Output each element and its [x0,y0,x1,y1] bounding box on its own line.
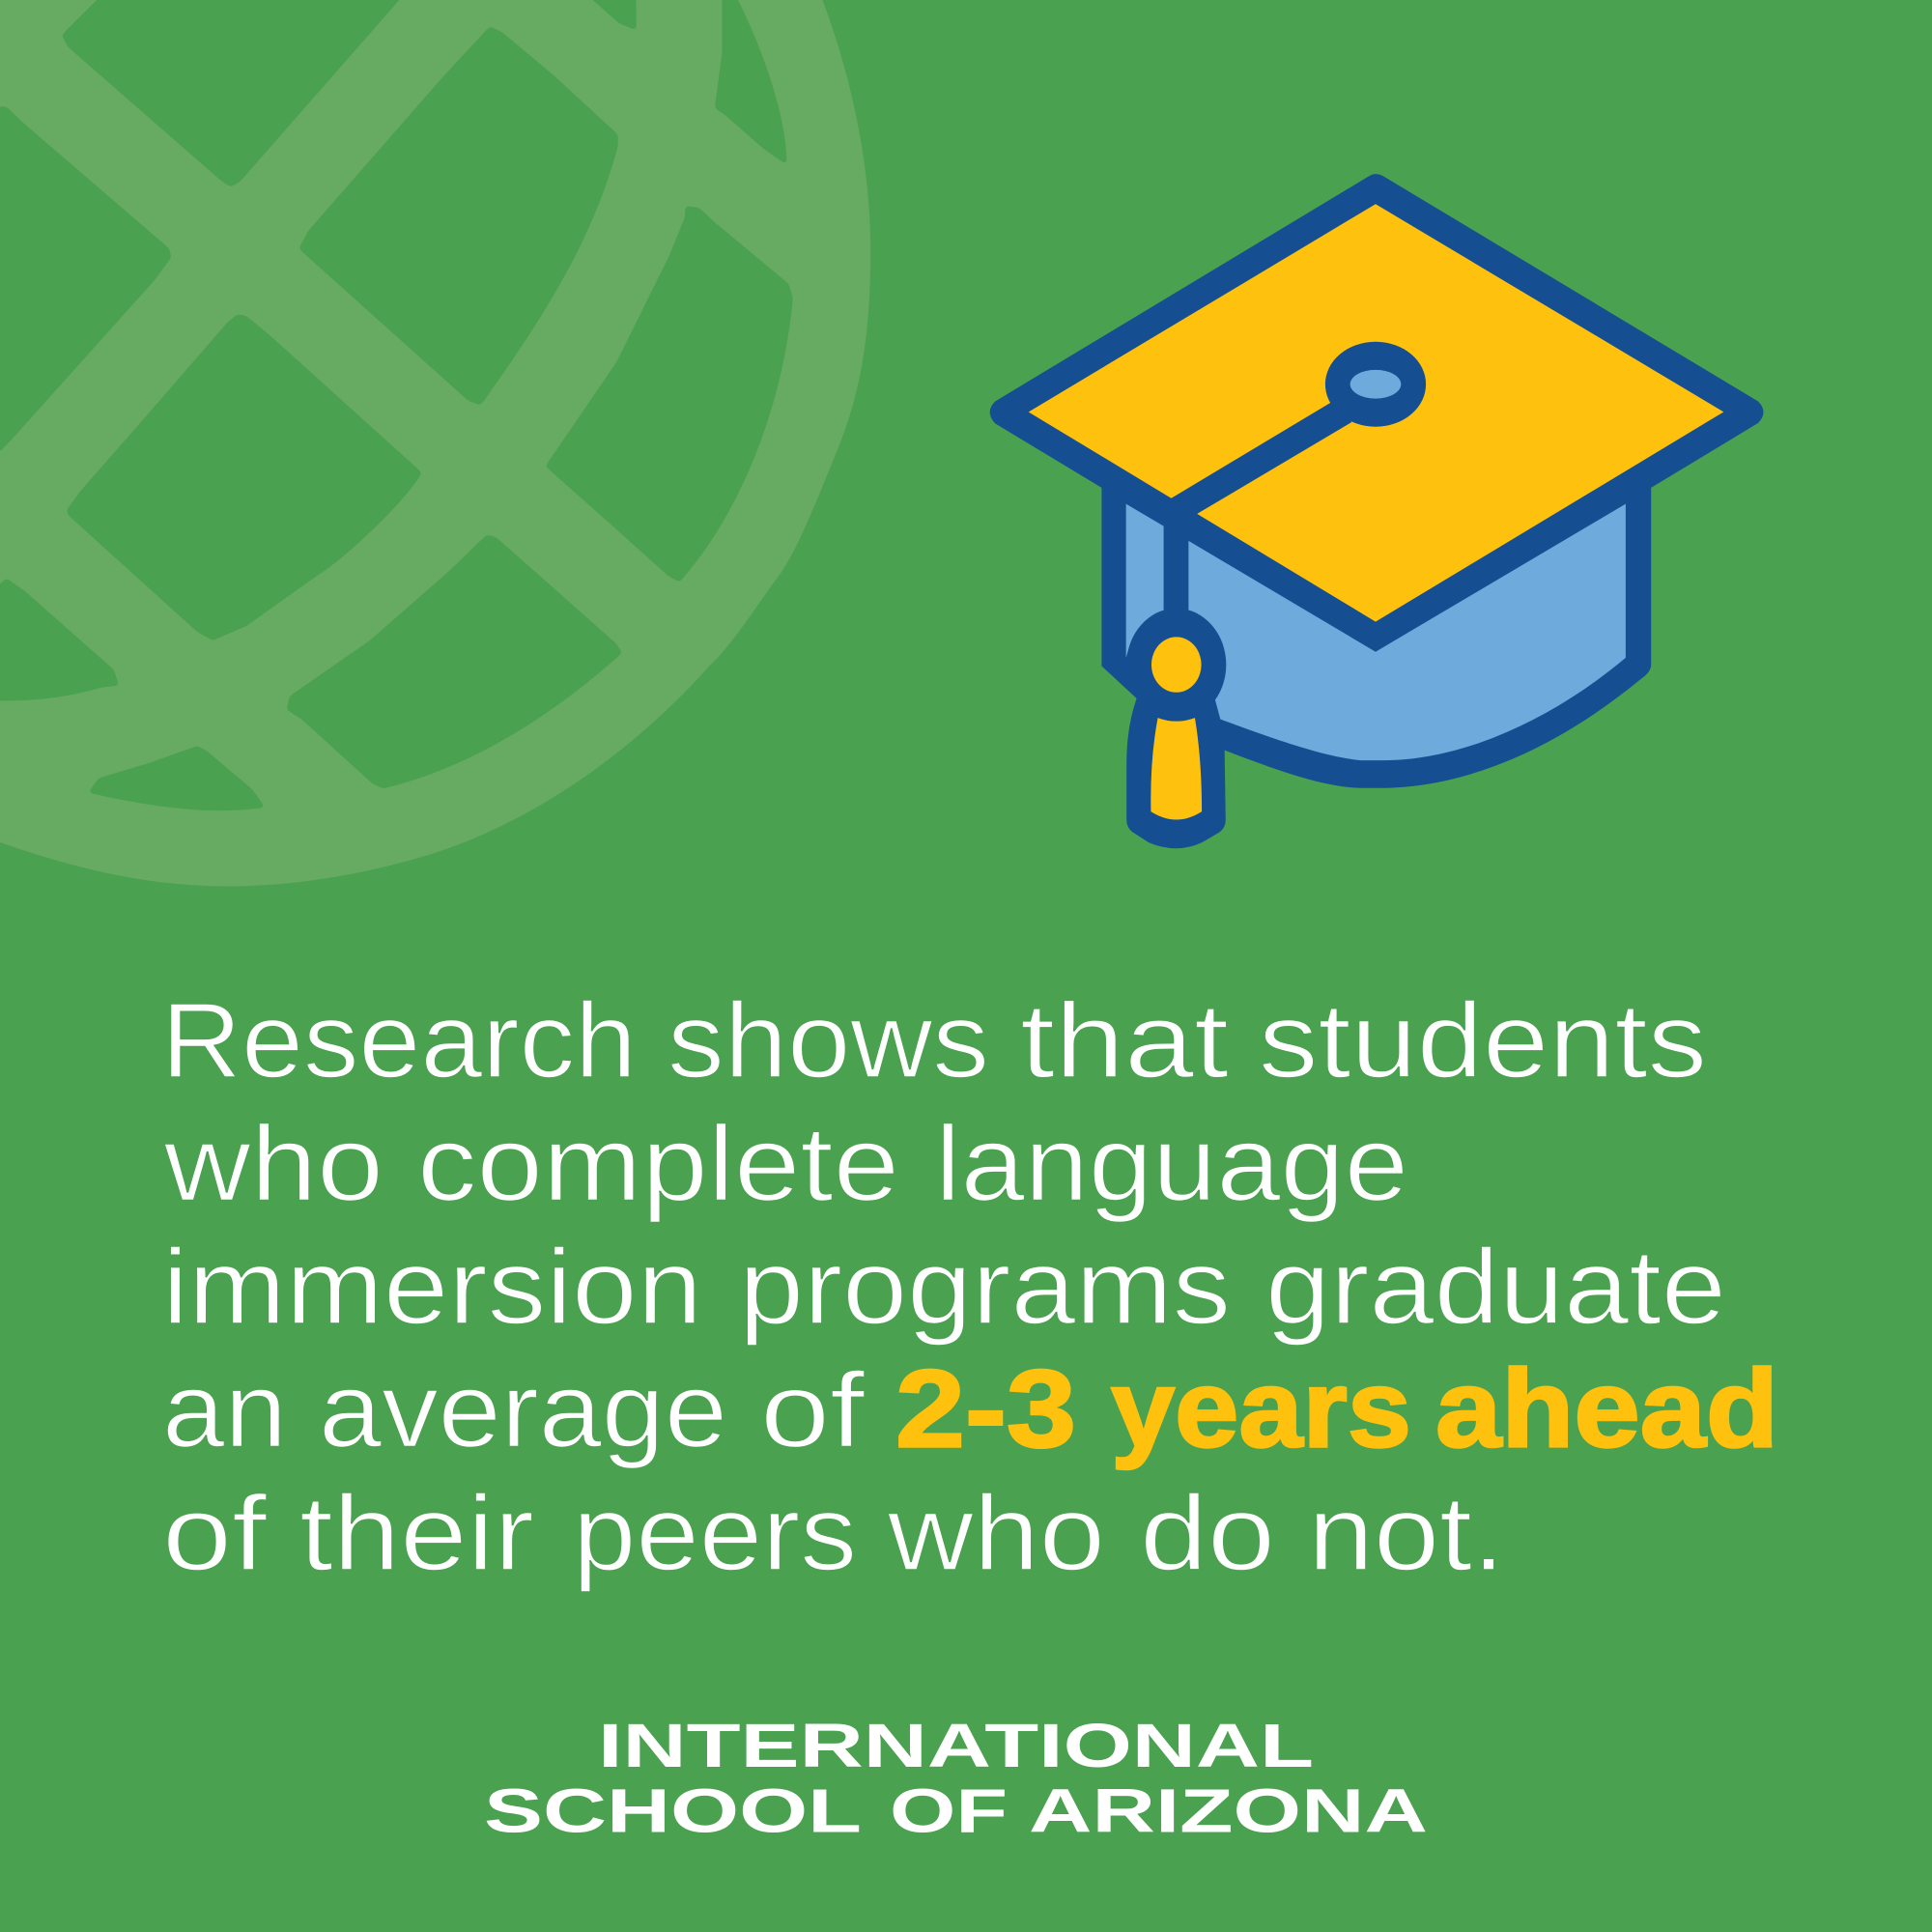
logo: International School of Arizona: SCHOOL [484,1776,862,1845]
highlight: 2-3 years ahead: 2-3 [895,1349,1076,1470]
logo: International School of Arizona [484,1711,1428,1845]
text: research statement: complete [417,1105,899,1223]
text: research statement: language [935,1105,1408,1223]
logo: International School of Arizona: OF [890,1776,1008,1845]
text: research statement: programs [739,1228,1231,1347]
text: research statement: immersion [162,1228,702,1347]
text: research statement: their [299,1474,534,1593]
text: research statement [161,981,1726,1593]
text: research statement: do [1140,1474,1275,1593]
text: research statement: that [1020,981,1229,1100]
text: research statement: of [162,1474,268,1593]
highlight: 2-3 years ahead [895,1349,1778,1470]
text: research statement: who [887,1474,1105,1593]
text: research statement: not. [1308,1474,1505,1593]
text: research statement: an [162,1350,287,1470]
highlight: 2-3 years ahead: years [1111,1349,1411,1470]
icon: globe watermark [0,0,870,886]
text: research statement: average [319,1350,727,1470]
icon: graduation cap [990,174,1763,848]
logo: International School of Arizona: INTERNATIONAL [598,1711,1314,1780]
text: research statement: shows [668,981,989,1100]
text: research statement: students [1259,981,1707,1100]
text: research statement: of [760,1350,866,1470]
highlight: 2-3 years ahead: ahead [1435,1349,1778,1470]
logo: International School of Arizona: ARIZONA [1029,1776,1428,1845]
text: research statement: Research [161,981,637,1100]
text: research statement: who [163,1105,384,1223]
text: research statement: graduate [1265,1228,1726,1347]
text: research statement: peers [573,1474,857,1593]
